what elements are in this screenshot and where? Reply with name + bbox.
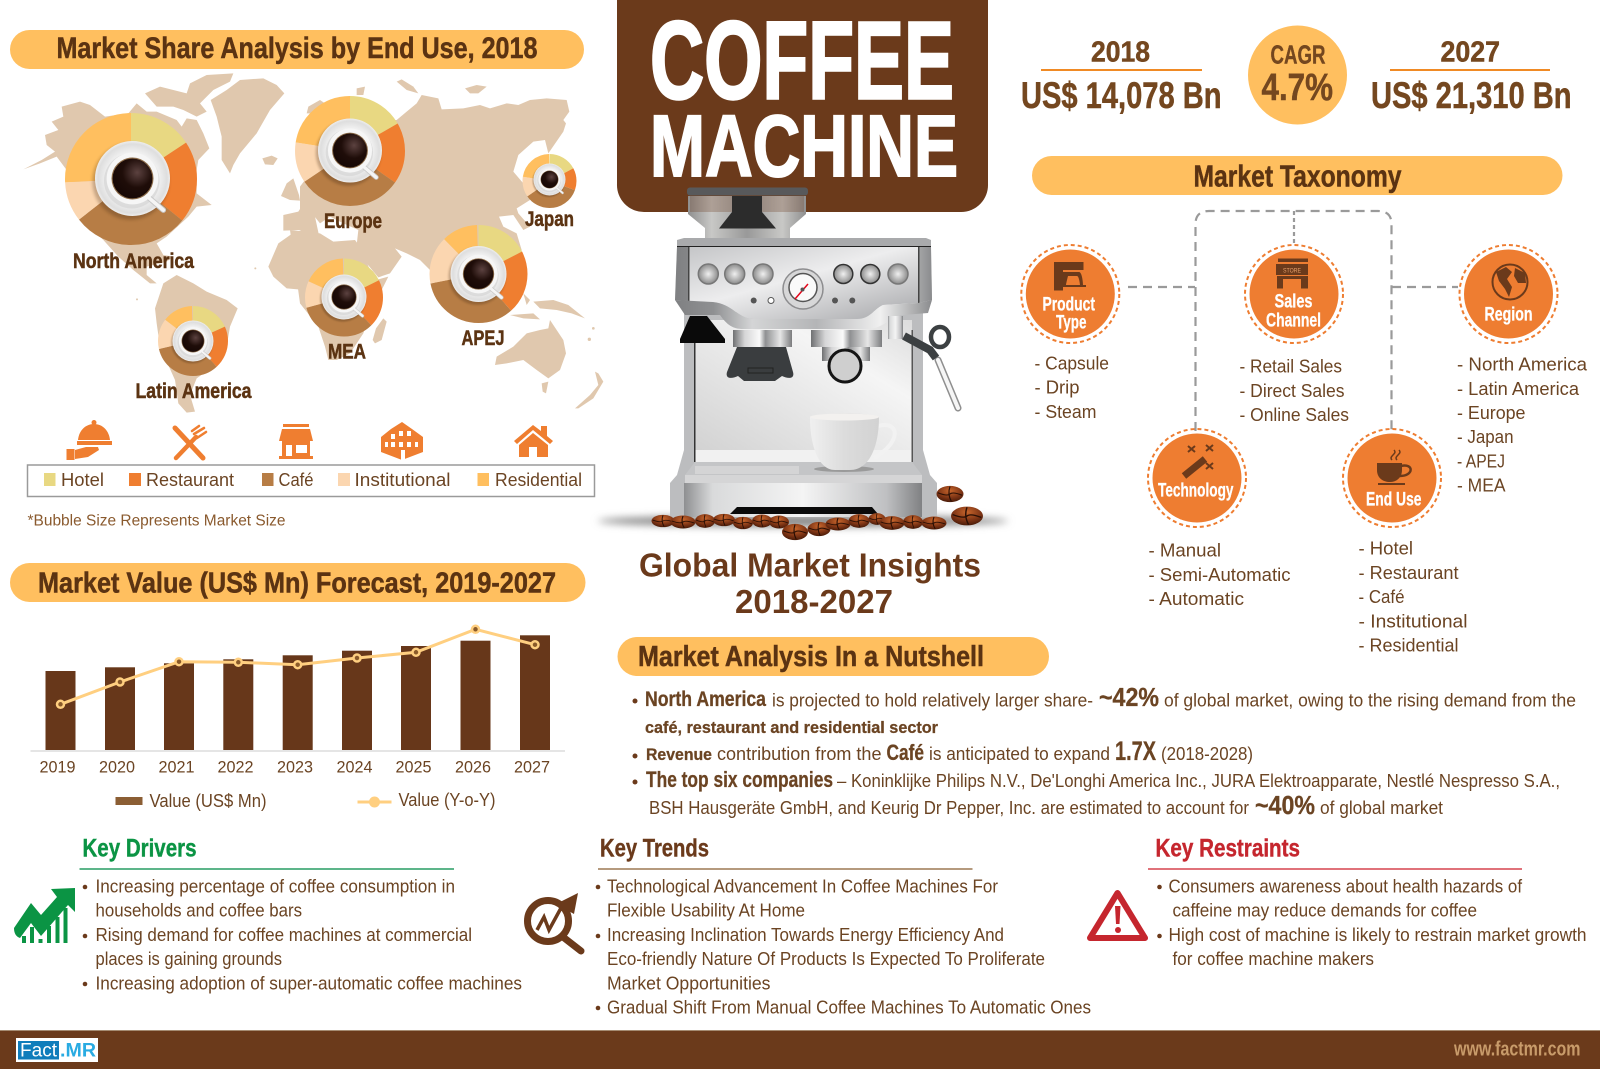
x axis labels: 2023: [277, 758, 313, 776]
icon: coffee cup: [1377, 450, 1411, 485]
panel: market share analysis by end use: [8, 30, 603, 530]
list: end use: - Restaurant: [1358, 563, 1458, 583]
icon: residential house: [514, 425, 553, 457]
legend: Café: [278, 470, 314, 490]
list: key trends: Eco-friendly Nature Of Products Is Expected To Proliferate: [607, 949, 1045, 969]
text: bullet revenue: 1.7X: [1115, 736, 1156, 766]
subtitle: global market insights: 2018-2027: [735, 583, 893, 620]
black hook: [680, 316, 725, 343]
title box: COFFEE: [650, 0, 954, 122]
logo: Fact.MR: [16, 1038, 98, 1062]
subtitle: global market insights: [639, 546, 981, 620]
taxonomy node: product type: Product: [1042, 294, 1095, 316]
x axis labels: 2026: [455, 758, 491, 776]
bubble: MEA: [320, 274, 366, 322]
icon: growth arrow: [14, 888, 75, 943]
taxonomy node: region: Region: [1484, 304, 1532, 326]
list: technology: - Automatic: [1148, 589, 1244, 609]
list: sales channel: - Retail Sales: [1240, 356, 1342, 376]
panel: key trends: [528, 834, 1091, 1018]
icon: cafe storefront: [279, 424, 313, 459]
text: bullet North America: café, restaurant and residential sector: [645, 718, 938, 737]
text: bullet top six companies: The top six companies: [646, 767, 833, 792]
icon: globe: [1492, 264, 1528, 300]
icon: institutional building: [381, 422, 423, 460]
machine body: [670, 238, 937, 517]
text: bullet revenue: [632, 736, 1253, 766]
text: bullet North America: is projected to hold relatively larger share-: [772, 690, 1093, 710]
bubble: Europe: [316, 118, 382, 186]
heading: key drivers: Key Drivers: [82, 834, 196, 862]
list: key restraints: Consumers awareness about health hazards of: [1168, 876, 1523, 896]
region labels: Latin America: [136, 380, 252, 403]
list: region: - APEJ: [1457, 452, 1505, 472]
icon: warning triangle: [1090, 893, 1145, 938]
text: bullet North America: [632, 682, 1576, 737]
indicator dots: [751, 298, 855, 304]
list: region: - North America: [1457, 354, 1588, 374]
x axis labels: 2020: [99, 758, 135, 776]
list: product type: - Drip: [1034, 378, 1080, 398]
taxonomy node: region: [1460, 245, 1558, 343]
list: key drivers: Increasing percentage of coffee consumption in: [96, 876, 455, 896]
x axis labels: 2022: [218, 758, 254, 776]
list: sales channel: - Online Sales: [1240, 405, 1349, 425]
list: end use: - Institutional: [1358, 612, 1468, 632]
region labels: MEA: [328, 340, 366, 364]
list: region: - MEA: [1457, 476, 1506, 496]
subtitle: global market insights: Global Market Insights: [639, 546, 981, 584]
text: bullet top six companies: [632, 767, 1560, 820]
x axis labels: 2025: [396, 758, 432, 776]
list: key drivers: [83, 876, 522, 994]
list: key drivers: Rising demand for coffee machines at commercial: [96, 925, 472, 945]
panel: market analysis in a nutshell: [618, 637, 1576, 820]
list: key trends: Gradual Shift From Manual Coffee Machines To Automatic Ones: [607, 998, 1091, 1018]
stat: 2027 value: [1371, 36, 1572, 116]
list: sales channel: [1240, 356, 1349, 425]
region labels: APEJ: [462, 327, 504, 350]
logo: Fact.MR: Fact: [20, 1040, 58, 1062]
taxonomy node: end use: [1343, 429, 1441, 527]
text: bullet top six companies: – Koninklijke Philips N.V., De'Longhi America Inc., JURA Elektroapparate, Nestlé Nespresso S.A.,: [837, 771, 1560, 791]
text: bullet top six companies: of global market: [1320, 798, 1443, 818]
text: bullet North America: ~42%: [1099, 682, 1159, 712]
line chart: y-o-y: [57, 626, 538, 708]
pressure gauge: [783, 269, 823, 309]
list: end use: [1358, 538, 1468, 656]
text: bullet North America: North America: [645, 688, 766, 711]
legend: Restaurant: [146, 470, 234, 490]
taxonomy node: technology: Technology: [1158, 480, 1234, 502]
icon: magnifier with chart: [528, 893, 581, 951]
region labels: Japan: [525, 208, 574, 231]
heading pill: forecast: Market Value (US$ Mn) Forecast, 2019-2027: [38, 568, 556, 600]
note: bubble size: *Bubble Size Represents Market Size: [28, 512, 286, 530]
list: key drivers: households and coffee bars: [96, 900, 302, 920]
icon: restaurant fork and knife: [175, 426, 206, 458]
hopper: [687, 188, 808, 241]
text: bullet revenue: Revenue: [646, 745, 712, 764]
legend: [28, 465, 594, 496]
taxonomy node: sales channel: [1245, 245, 1343, 343]
footer bar: [0, 1030, 1600, 1069]
list: end use: - Residential: [1358, 636, 1458, 656]
list: region: - Latin America: [1457, 379, 1580, 399]
list: region: - Europe: [1457, 403, 1526, 423]
legend: Residential: [495, 470, 582, 490]
knobs: [698, 264, 908, 284]
panel: key restraints: [1090, 834, 1586, 969]
list: key trends: Technological Advancement In Coffee Machines For: [607, 876, 998, 896]
group head right: [811, 316, 903, 382]
list: key trends: [596, 876, 1091, 1018]
world map: [8, 73, 603, 413]
list: key restraints: High cost of machine is likely to restrain market growth: [1168, 925, 1586, 945]
icon: hotel cloche on hand: [66, 420, 112, 460]
list: sales channel: - Direct Sales: [1240, 381, 1344, 401]
chart legend: Value (Y-o-Y): [398, 790, 496, 810]
icon: coffee maker: [1054, 262, 1086, 290]
list: product type: [1034, 354, 1109, 422]
list: end use: - Hotel: [1358, 538, 1413, 558]
heading pill: market share: Market Share Analysis by End Use, 2018: [56, 32, 538, 65]
x axis labels: 2024: [336, 758, 372, 776]
list: technology: - Semi-Automatic: [1148, 565, 1290, 585]
list: key restraints: for coffee machine makers: [1172, 949, 1374, 969]
icon: store: STORE: [1283, 268, 1301, 274]
taxonomy node: sales channel: Channel: [1266, 310, 1321, 332]
chart legend: [116, 790, 496, 811]
text: bullet top six companies: BSH Hausgeräte GmbH, and Keurig Dr Pepper, Inc. are estimated to account for: [649, 798, 1249, 818]
bubble: Japan: [532, 164, 566, 197]
x axis labels: 2021: [158, 758, 194, 776]
chrome strip: [675, 300, 932, 329]
heading pill: market taxonomy: [1032, 156, 1562, 195]
taxonomy node: product type: [1021, 245, 1119, 343]
top cap: [677, 238, 931, 247]
white cup: [810, 413, 895, 472]
heading pill: nutshell: Market Analysis In a Nutshell: [638, 641, 984, 673]
list: region: - Japan: [1457, 427, 1514, 447]
list: product type: - Steam: [1034, 402, 1096, 422]
stat: CAGR: 4.7%: [1262, 67, 1333, 109]
list: key trends: Flexible Usability At Home: [607, 900, 805, 920]
chart legend: Value (US$ Mn): [150, 791, 266, 811]
region labels: North America: [73, 250, 194, 273]
stat: 2018 value: [1021, 36, 1222, 116]
taxonomy node: product type: Type: [1056, 312, 1086, 334]
taxonomy node: end use: End Use: [1366, 490, 1422, 510]
list: technology: [1148, 540, 1290, 609]
heading: key restraints: Key Restraints: [1156, 834, 1300, 862]
x axis labels: 2019: [40, 758, 76, 776]
steam wand: [904, 327, 958, 408]
panel: key drivers: [14, 834, 522, 994]
taxonomy node: sales channel: Sales: [1274, 292, 1312, 312]
list: technology: - Manual: [1148, 540, 1221, 560]
stat: 2018 value: 2018: [1091, 36, 1150, 68]
panel: market value forecast: [10, 563, 586, 811]
taxonomy node: technology: [1148, 429, 1246, 527]
region labels: Europe: [324, 210, 382, 233]
bubble: North America: [92, 141, 170, 220]
list: end use: - Café: [1358, 587, 1404, 607]
text: bullet revenue: is anticipated to expand: [929, 744, 1110, 764]
drip tray and base: [684, 462, 922, 517]
icon: magic wand: [1184, 445, 1213, 476]
logo: Fact.MR: .MR: [60, 1040, 96, 1062]
heading pill: market taxonomy: Market Taxonomy: [1194, 158, 1402, 194]
legend: Hotel: [61, 470, 104, 490]
region labels: [73, 208, 574, 403]
stat: 2027 value: 2027: [1440, 36, 1500, 68]
list: key drivers: Increasing adoption of super-automatic coffee machines: [96, 974, 522, 994]
stat: CAGR: CAGR: [1270, 40, 1326, 70]
bar chart: [30, 635, 565, 751]
portafilter left: [727, 330, 793, 381]
text: bullet revenue: Café: [886, 740, 924, 765]
list: key trends: Increasing Inclination Towards Energy Efficiency And: [607, 925, 1004, 945]
list: region: [1457, 354, 1588, 496]
text: bullet North America: of global market, owing to the rising demand from the: [1164, 690, 1576, 710]
list: product type: - Capsule: [1034, 354, 1109, 374]
coffee beans: [652, 486, 983, 540]
bubble: Latin America: [171, 320, 214, 364]
list: key trends: Market Opportunities: [607, 974, 770, 994]
legend: Institutional: [354, 470, 450, 490]
heading: key trends: Key Trends: [600, 834, 709, 862]
stat: 2018 value: US$ 14,078 Bn: [1021, 75, 1222, 116]
list: key restraints: caffeine may reduce demands for coffee: [1172, 900, 1477, 920]
title box: [617, 0, 988, 212]
text: bullet revenue: (2018-2028): [1161, 744, 1253, 764]
list: key restraints: [1157, 876, 1586, 969]
taxonomy connectors: [1128, 211, 1458, 431]
list: key drivers: places is gaining grounds: [96, 949, 282, 969]
coffee machine illustration: [598, 188, 1008, 540]
title box: MACHINE: [650, 98, 958, 195]
text: bullet top six companies: ~40%: [1255, 790, 1315, 820]
control panel: [675, 247, 932, 319]
text: bullet revenue: contribution from the: [717, 744, 882, 764]
x axis labels: [40, 758, 550, 776]
x axis labels: 2027: [514, 758, 550, 776]
stat: CAGR: [1248, 26, 1347, 124]
bubble: APEJ: [449, 246, 506, 305]
